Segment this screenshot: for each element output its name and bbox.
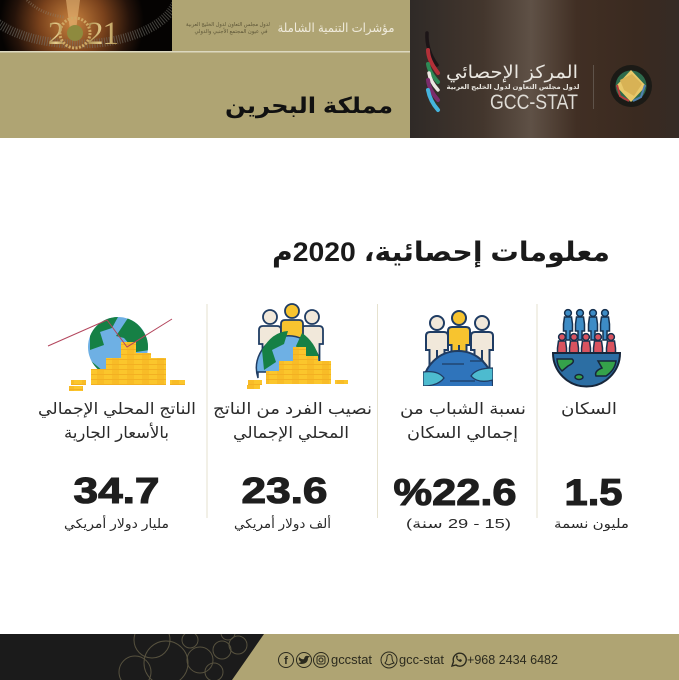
label: نسبة الشباب من <box>400 401 526 419</box>
header band <box>0 0 679 138</box>
logo text: GCC-STAT <box>490 91 578 114</box>
icon: people, globe and coins <box>247 304 348 389</box>
value: 34.7 <box>74 470 160 511</box>
footer pattern <box>118 634 248 680</box>
2021 banner image <box>0 0 178 52</box>
label: إجمالي السكان <box>407 425 518 443</box>
label <box>400 401 526 443</box>
label <box>38 401 196 443</box>
banner small text: في عيون المجتمع الأجنبي والدولي <box>194 27 268 35</box>
label <box>213 401 372 443</box>
banner small text <box>186 22 270 35</box>
banner subtitle: مؤشرات التنمية الشاملة <box>278 21 394 36</box>
panel: youth share <box>394 311 526 531</box>
icon: people on globe bowl <box>553 310 620 386</box>
country heading: مملكة البحرين <box>225 93 393 119</box>
unit: مليون نسمة <box>554 516 629 532</box>
icon: globe, coins and trend line <box>48 317 185 391</box>
label: المحلي الإجمالي <box>233 425 349 443</box>
panel: GDP per capita <box>213 304 372 532</box>
label: السكان <box>561 401 617 418</box>
logo text: المركز الإحصائي <box>446 62 578 83</box>
icon: GCC-Stat ribbon <box>427 33 438 110</box>
label: الناتج المحلي الإجمالي <box>38 401 196 419</box>
label: بالأسعار الجارية <box>64 422 169 443</box>
logo text: لدول مجلس التعاون لدول الخليج العربية <box>446 84 580 91</box>
panel: GDP <box>38 317 196 532</box>
2021 banner image: 21 <box>87 16 119 52</box>
contact text: gcc-stat <box>399 652 444 667</box>
contact text <box>331 652 558 667</box>
column dividers <box>206 304 538 518</box>
contact text: +968 2434 6482 <box>467 652 558 667</box>
unit: ألف دولار أمريكي <box>234 515 331 532</box>
unit: مليار دولار أمريكي <box>64 515 169 532</box>
footer band <box>0 634 679 680</box>
value: %22.6 <box>394 472 516 513</box>
divider <box>593 65 594 109</box>
main title: معلومات إحصائية، 2020م <box>272 237 610 268</box>
value: 1.5 <box>564 472 622 513</box>
logo text <box>446 62 580 114</box>
banner small text: لدول مجلس التعاون لدول الخليج العربية <box>186 22 270 28</box>
contact text: gccstat <box>331 652 372 667</box>
social icons: f <box>284 655 288 667</box>
icon: youth on globe <box>423 310 494 386</box>
label: نصيب الفرد من الناتج <box>213 401 372 419</box>
icon: GCC emblem <box>610 65 652 107</box>
social icons <box>278 652 466 668</box>
panel: population <box>553 310 629 532</box>
2021 banner image: 2 <box>48 16 64 52</box>
value: 23.6 <box>242 470 328 511</box>
unit: (15 - 29 سنة) <box>406 516 511 531</box>
